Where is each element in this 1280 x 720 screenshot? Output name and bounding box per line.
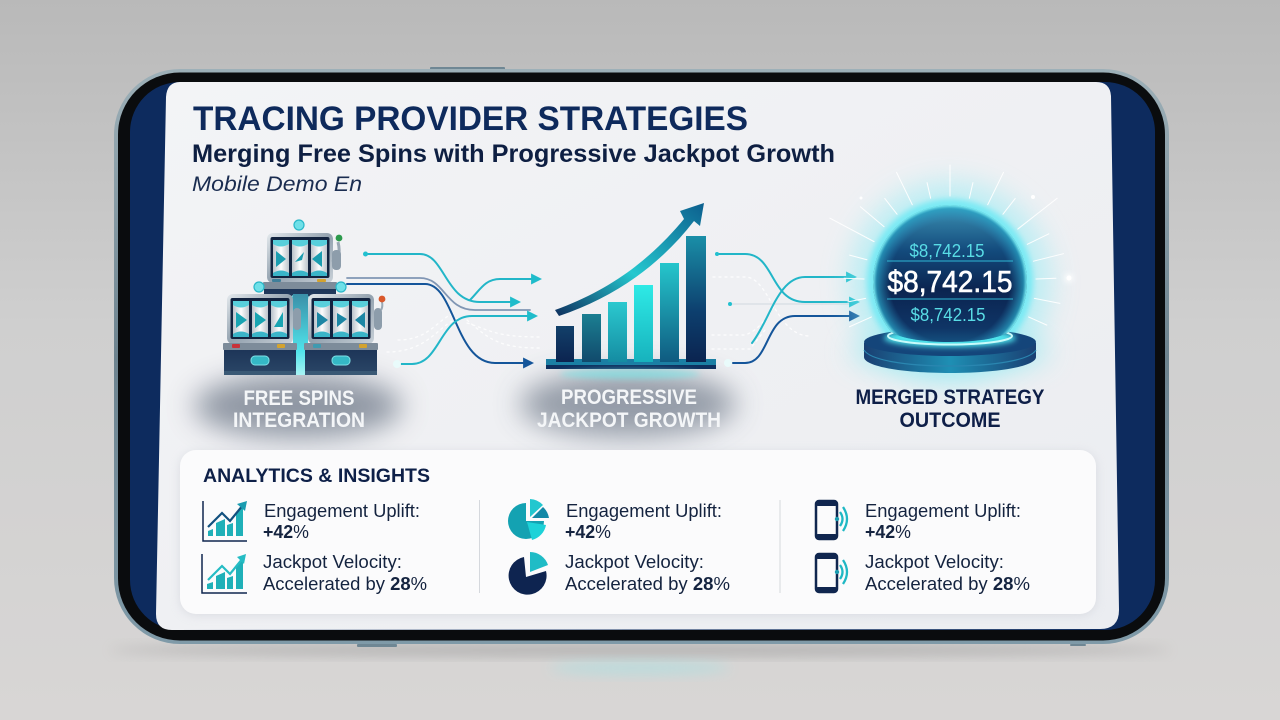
column dividers [480, 500, 780, 593]
chart base [546, 359, 716, 379]
orb amount main: $8,742.15 [888, 264, 1012, 299]
right slot machine [304, 294, 385, 375]
analytics card [180, 450, 1096, 615]
flow start nodes [715, 252, 732, 367]
icon: phone signal one [816, 501, 847, 539]
title: TRACING PROVIDER STRATEGIES [193, 100, 748, 138]
progressive jackpot label: JACKPOT GROWTH [537, 409, 721, 432]
icon: slot machines [223, 220, 385, 375]
metric: engagement uplift two [565, 501, 722, 542]
dotted flow lines [387, 313, 540, 352]
orb rim [873, 205, 1027, 341]
orb readout [887, 241, 1013, 325]
metric: engagement uplift three [865, 501, 1021, 542]
metric: engagement uplift two: +42% [565, 522, 611, 542]
metric: engagement uplift one [263, 501, 420, 542]
progressive jackpot label [537, 386, 721, 432]
flow arrows: jackpot to outcome [712, 252, 850, 367]
navy screen [130, 82, 1155, 630]
jackpot orb [873, 205, 1027, 342]
pedestal [864, 328, 1036, 373]
free spins label [233, 387, 365, 432]
cyan orbs [254, 220, 346, 292]
content panel [156, 82, 1119, 630]
orb amount bottom: $8,742.15 [910, 305, 986, 325]
icon: line chart two [202, 554, 247, 593]
glowing centre column [293, 294, 308, 375]
metric: engagement uplift three: Engagement Uplift: [865, 501, 1021, 521]
tagline: Mobile Demo En [192, 173, 362, 196]
metric: jackpot velocity two: Jackpot Velocity: [565, 552, 704, 572]
orb amount top: $8,742.15 [910, 241, 984, 261]
metric: engagement uplift two: Engagement Uplift: [566, 501, 722, 521]
metric: jackpot velocity one [263, 552, 427, 594]
left slot machine [223, 294, 301, 375]
free spins label: INTEGRATION [233, 409, 365, 432]
floor shadow and glow [110, 644, 1170, 675]
metric: engagement uplift one: Engagement Uplift: [264, 501, 420, 521]
metric: jackpot velocity three [865, 552, 1030, 594]
icon: line chart one [203, 501, 247, 541]
chart bars [556, 236, 706, 362]
free spins label shadow [194, 374, 402, 438]
phone device [114, 67, 1169, 647]
top slot machine [263, 233, 342, 314]
flow start nodes [363, 252, 401, 368]
icon: phone signal two [816, 554, 847, 592]
icon: pie chart two [509, 552, 548, 595]
metric: jackpot velocity three: Jackpot Velocity: [865, 552, 1004, 572]
icon: pie chart one [508, 499, 549, 540]
progressive jackpot label: PROGRESSIVE [561, 386, 697, 409]
growth arrow [555, 203, 704, 316]
merged strategy label: OUTCOME [900, 409, 1000, 432]
merged strategy label [856, 386, 1044, 432]
metric: jackpot velocity three: Accelerated by 28% [865, 574, 1030, 594]
phone black bezel [118, 72, 1165, 640]
metric: jackpot velocity one: Jackpot Velocity: [263, 552, 402, 572]
metric: jackpot velocity two [565, 552, 730, 594]
metric: engagement uplift one: +42% [263, 522, 309, 542]
metric: jackpot velocity two: Accelerated by 28% [565, 574, 730, 594]
dotted flow lines [712, 277, 810, 349]
flow arrows: spins to jackpot [347, 252, 540, 368]
free spins label: FREE SPINS [244, 387, 354, 410]
orb glow and rays [830, 165, 1073, 382]
metric: jackpot velocity one: Accelerated by 28% [263, 574, 427, 594]
bar chart: jackpot growth [546, 203, 716, 379]
analytics heading: ANALYTICS & INSIGHTS [203, 466, 430, 487]
phone metal frame [114, 69, 1169, 644]
metric: engagement uplift three: +42% [865, 522, 911, 542]
progressive label shadow [520, 371, 736, 437]
phone side buttons [357, 67, 1086, 647]
merged strategy label: MERGED STRATEGY [856, 386, 1044, 409]
orb divider lines [887, 261, 1013, 299]
subtitle: Merging Free Spins with Progressive Jackpot Growth [192, 140, 835, 168]
